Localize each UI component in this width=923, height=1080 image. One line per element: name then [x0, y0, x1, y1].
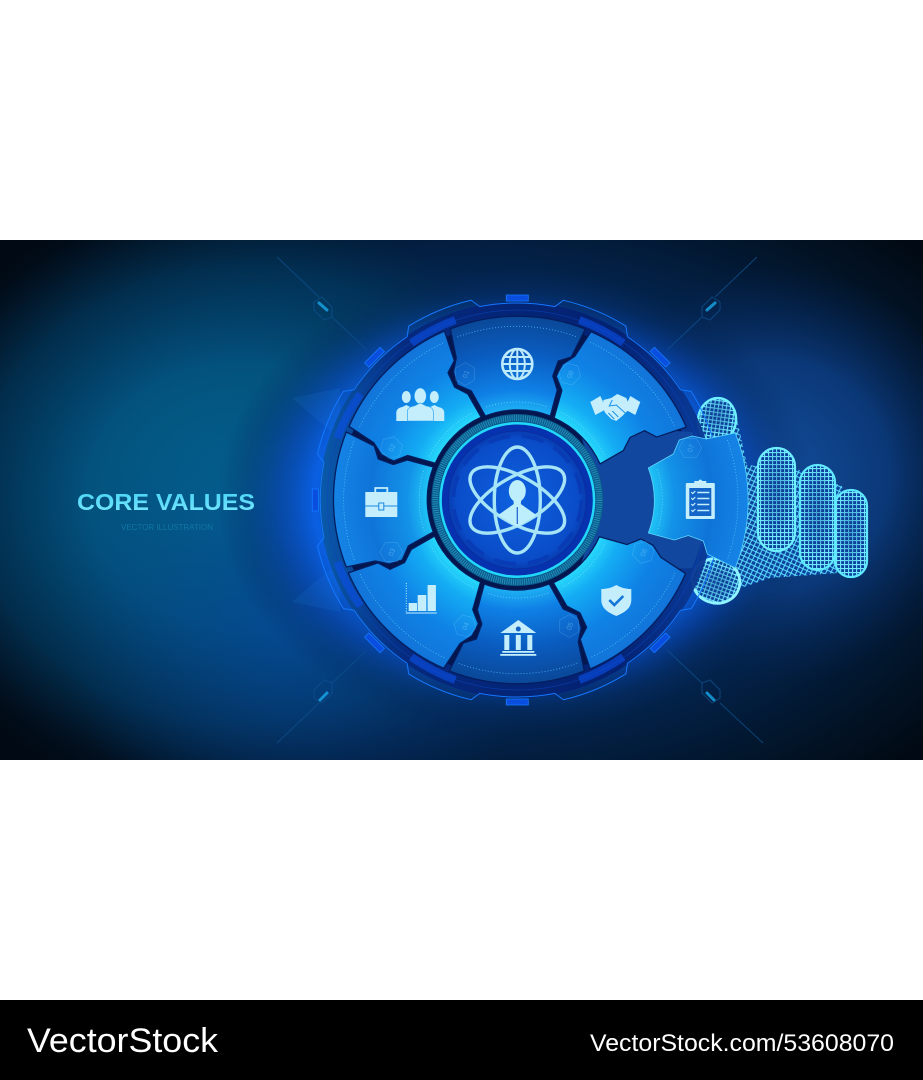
segment: upper left with people [340, 322, 506, 488]
segment: lower left with bar chart: 04 [462, 621, 471, 631]
icon: atom with person [460, 447, 575, 553]
segment: upper right with handshake [529, 323, 695, 489]
segment: top with globe [450, 316, 585, 416]
footer brand: VectorStock [27, 1022, 219, 1060]
icon: clipboard [686, 480, 715, 519]
seam backing disc [339, 322, 695, 678]
hand: lower fingertip [686, 552, 746, 610]
segment: upper left with people: 02 [388, 443, 398, 453]
icon: bank [500, 620, 536, 656]
central hub [431, 414, 603, 586]
segment: bottom with bank [449, 584, 584, 684]
subtitle: vector illustration: VECTOR ILLUSTRATION [121, 523, 213, 532]
dark blue banner background [0, 240, 923, 760]
segment: right with clipboard, displaced [648, 433, 748, 568]
icon: handshake [590, 394, 640, 421]
infographic canvas [0, 240, 923, 1080]
dark gap behind displaced segment [577, 425, 717, 575]
circular wheel diagram [298, 281, 748, 719]
segment: lower right with shield: 06 [640, 548, 649, 558]
title: core values: CORE VALUES [77, 489, 255, 515]
hand: folded finger three [835, 490, 867, 577]
segment: lower left with bar chart [339, 511, 505, 677]
icon: shield [601, 585, 631, 616]
wireframe hand [686, 396, 867, 610]
hand: top fingertip [695, 396, 739, 444]
icon: briefcase [365, 488, 397, 517]
footer image id: VectorStock.com/53608070 [590, 1030, 894, 1057]
bottom footer bar [0, 1000, 923, 1080]
segment: left with briefcase: 03 [388, 548, 397, 558]
HUD connector lines and ticks [277, 257, 763, 743]
segment: right with clipboard, displaced: 07 [687, 444, 696, 454]
hand: back of hand [700, 419, 853, 590]
icon: people [396, 388, 444, 421]
icon: globe [502, 349, 532, 379]
hand: folded finger two [800, 465, 835, 570]
icon: bar chart [406, 583, 437, 613]
outer HUD bezel [298, 281, 736, 719]
segment: left with briefcase [333, 432, 433, 567]
segment: upper right with handshake: 08 [566, 370, 576, 380]
hand: folded finger one [758, 448, 795, 551]
segment: top with globe: 01 [462, 370, 471, 380]
segment: lower right with shield [529, 512, 695, 678]
segment: bottom with bank: 05 [566, 622, 575, 632]
